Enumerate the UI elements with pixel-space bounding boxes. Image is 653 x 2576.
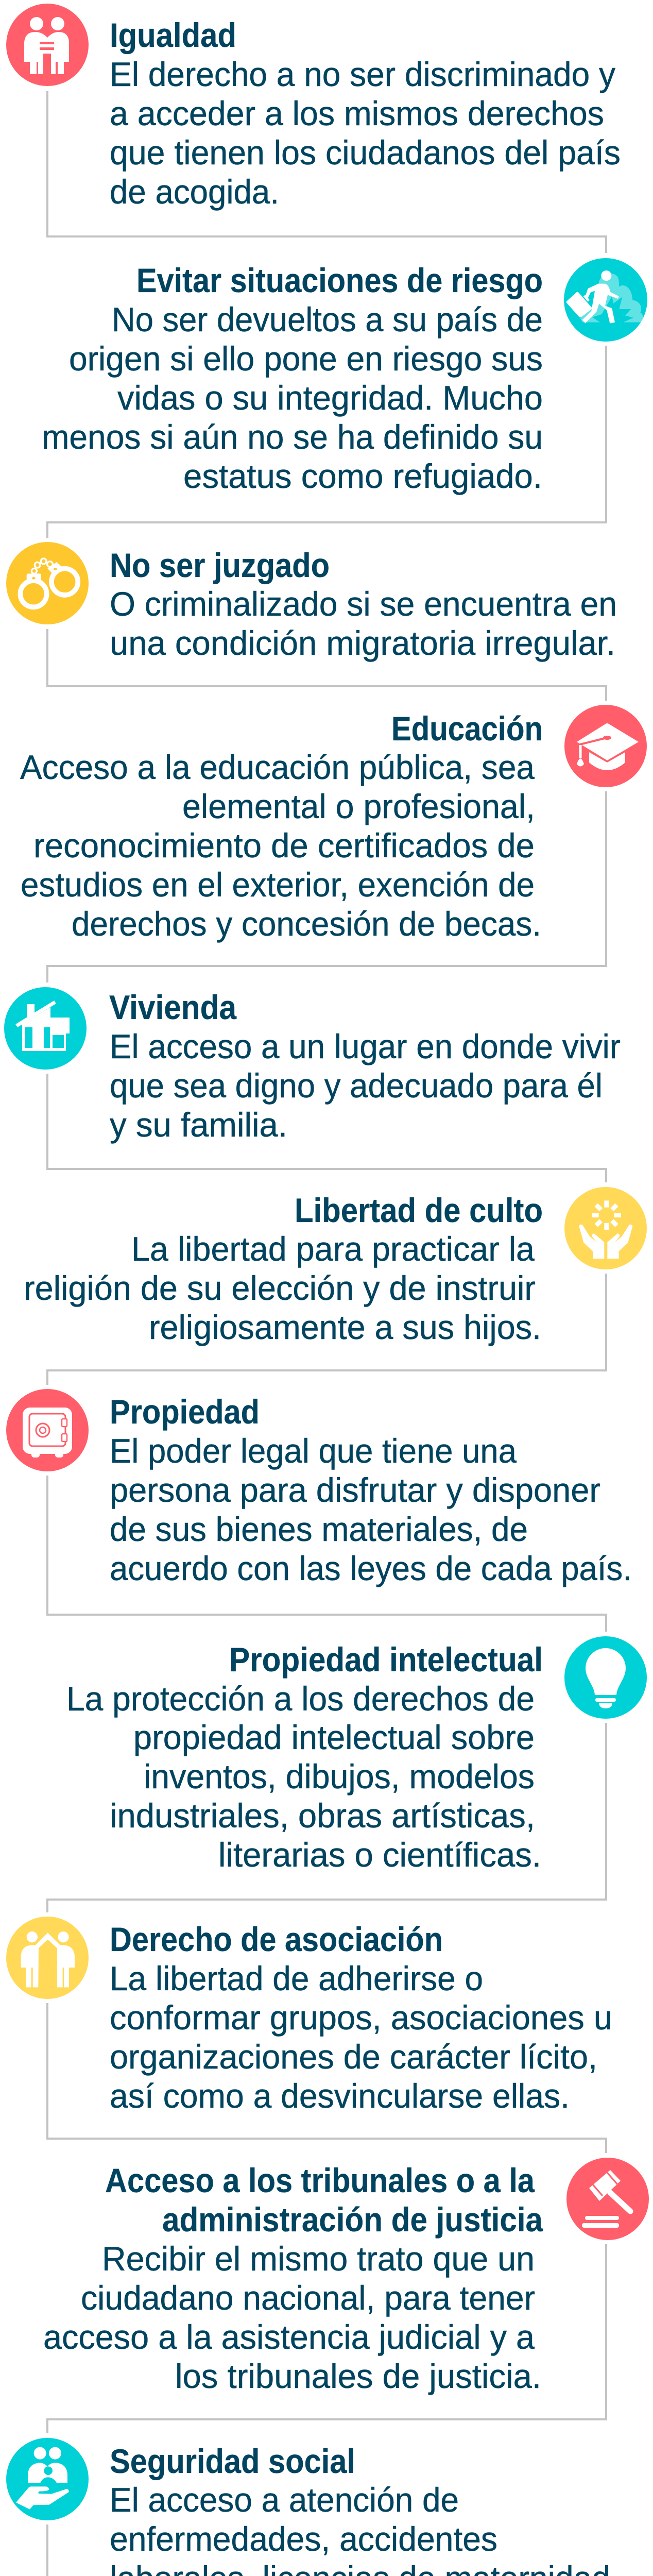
text block: elemental o profesional, (182, 787, 535, 825)
text block: La libertad de adherirse o (110, 1959, 483, 1997)
connector (47, 346, 606, 538)
heading: Propiedad intelectual (229, 1640, 543, 1679)
text block (110, 55, 621, 211)
section: Acceso a los tribunales (43, 2158, 649, 2395)
icon: gavel (566, 2158, 649, 2240)
section: No ser juzgado (6, 542, 617, 662)
text block: literarias o científicas. (218, 1836, 541, 1874)
text block: estatus como refugiado. (183, 457, 542, 495)
text block: El acceso a un lugar en donde vivir (110, 1027, 621, 1065)
connector (47, 91, 606, 253)
text block: de sus bienes materiales, de (110, 1510, 528, 1548)
text block: inventos, dibujos, modelos (144, 1757, 535, 1795)
text block: Acceso a la educación pública, sea (20, 748, 535, 786)
heading: administración de justicia (162, 2200, 543, 2239)
text block: así como a desvincularse ellas. (110, 2077, 570, 2115)
text block (42, 300, 543, 495)
text block: una condición migratoria irregular. (110, 624, 615, 662)
text block: y su familia. (110, 1106, 287, 1144)
text block: a acceder a los mismos derechos (110, 94, 604, 132)
text block: ciudadano nacional, para tener (81, 2279, 535, 2317)
text block (110, 1027, 621, 1144)
heading: Propiedad (110, 1393, 260, 1431)
text block: reconocimiento de certificados de (33, 826, 535, 865)
text block: Recibir el mismo trato que un (102, 2240, 535, 2278)
text block (110, 2481, 630, 2576)
text block (24, 1230, 541, 1346)
connector (47, 2244, 606, 2433)
heading: Vivienda (109, 988, 237, 1026)
text block: vidas o su integridad. Mucho (117, 379, 543, 417)
heading (105, 2161, 543, 2239)
icon: graduation cap (564, 705, 647, 787)
connector (47, 1074, 606, 1182)
heading: Evitar situaciones de riesgo (136, 261, 543, 299)
heading: Educación (391, 709, 543, 748)
connector (47, 2524, 606, 2576)
text block: El poder legal que tiene una (110, 1432, 517, 1470)
text block: organizaciones de carácter lícito, (110, 2038, 597, 2076)
connector (47, 2003, 606, 2153)
section: Derecho de asociación (6, 1917, 612, 2115)
heading: Libertad de culto (295, 1191, 543, 1229)
text block: industriales, obras artísticas, (110, 1797, 535, 1835)
text block: El acceso a atención de (110, 2481, 459, 2519)
icon: safe (6, 1389, 89, 1471)
text block: origen si ello pone en riesgo sus (69, 340, 543, 378)
connector (47, 629, 606, 701)
heading: No ser juzgado (110, 546, 330, 584)
text block: menos si aún no se ha definido su (42, 418, 543, 456)
connector (47, 1274, 606, 1385)
icon: two people joined (6, 1917, 89, 1999)
text block (20, 748, 541, 943)
icon: hands and sun (564, 1187, 647, 1269)
heading: Seguridad social (110, 2442, 355, 2480)
section: Libertad de culto (24, 1187, 647, 1346)
text block: persona para disfrutar y disponer (110, 1471, 600, 1509)
heading: Derecho de asociación (110, 1920, 443, 1958)
text block: enfermedades, accidentes (110, 2520, 497, 2558)
section: Seguridad social (6, 2438, 630, 2576)
icon: person running with suitcase (564, 258, 647, 342)
text block (110, 1432, 632, 1587)
section: Vivienda (4, 987, 621, 1144)
section: Educación (20, 705, 647, 943)
text block: La libertad para practicar la (131, 1230, 535, 1268)
text block: religiosamente a sus hijos. (149, 1308, 541, 1346)
icon: handcuffs (6, 542, 89, 624)
text block: conformar grupos, asociaciones u (110, 1998, 612, 2037)
connector (47, 1723, 606, 1912)
text block (66, 1680, 541, 1874)
text block: religión de su elección y de instruir (24, 1269, 536, 1307)
text block: propiedad intelectual sobre (133, 1718, 535, 1756)
text block (110, 1959, 612, 2115)
text block: derechos y concesión de becas. (72, 905, 541, 943)
text block: O criminalizado si se encuentra en (110, 585, 617, 623)
connector (47, 1476, 606, 1632)
icon: house (4, 987, 87, 1070)
text block: que sea digno y adecuado para él (110, 1066, 603, 1105)
heading: Acceso a los tribunales o a la (105, 2161, 535, 2199)
heading: Igualdad (110, 16, 236, 54)
text block (110, 585, 617, 662)
section: Propiedad intelectual (66, 1636, 647, 1874)
text block: los tribunales de justicia. (175, 2357, 541, 2395)
text block: acceso a la asistencia judicial y a (43, 2318, 535, 2356)
connector (47, 791, 606, 982)
text block: de acogida. (110, 173, 279, 211)
text block: estudios en el exterior, exención de (21, 866, 535, 904)
text block: que tienen los ciudadanos del país (110, 133, 621, 172)
icon: two people with equal sign (6, 4, 89, 86)
section: Evitar situaciones de riesgo (42, 258, 647, 495)
text block: acuerdo con las leyes de cada país. (110, 1549, 632, 1587)
text block (43, 2240, 541, 2395)
section: Igualdad (6, 4, 621, 211)
text block: No ser devueltos a su país de (112, 300, 543, 338)
section: Propiedad (6, 1389, 632, 1587)
icon: light bulb (564, 1636, 647, 1719)
text block: La protección a los derechos de (66, 1680, 535, 1718)
icon: family in a hand (6, 2438, 89, 2520)
text block: El derecho a no ser discriminado y (110, 55, 615, 93)
